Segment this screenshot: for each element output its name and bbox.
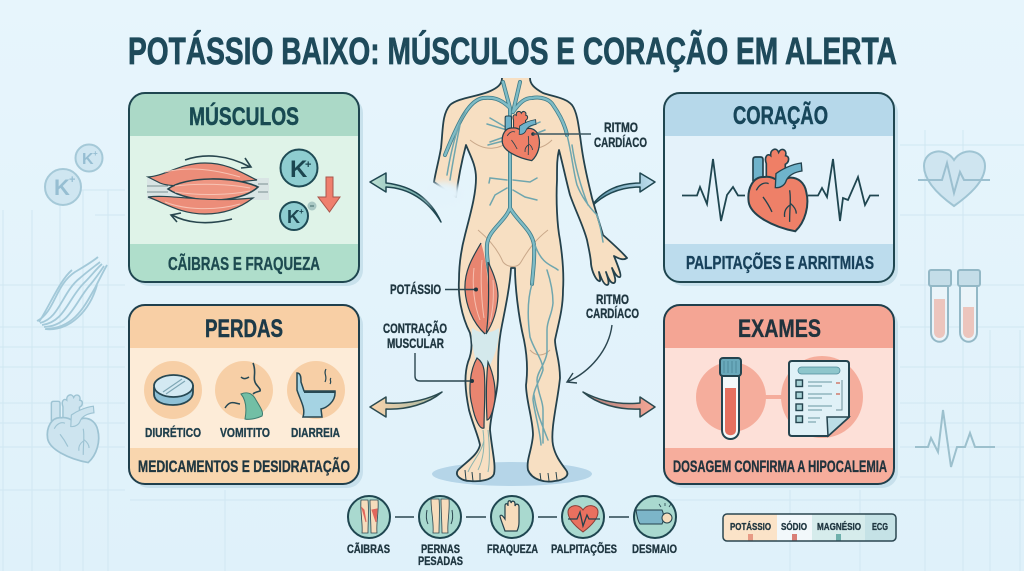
legend: SÓDIO bbox=[781, 520, 807, 533]
icon: lab report bbox=[789, 361, 849, 436]
knee bbox=[472, 328, 499, 367]
icon: toilet bbox=[287, 361, 345, 440]
body outline bbox=[434, 78, 627, 482]
panel: músculos bbox=[129, 93, 363, 286]
caption: palpitações e arritmias: PALPITAÇÕES E ARRITMIAS bbox=[686, 252, 874, 273]
label: ritmo cardíaco top: CARDÍACO bbox=[594, 135, 647, 150]
caption: medicamentos e desidratação: MEDICAMENTOS E DESIDRATAÇÃO bbox=[138, 456, 350, 476]
panel: exames bbox=[664, 305, 898, 488]
icon: potassium ions: + bbox=[93, 149, 98, 158]
icon: large K+ bbox=[280, 150, 318, 186]
icon: small K+: + bbox=[299, 207, 304, 216]
arrow: to perdas bbox=[370, 392, 442, 417]
label: ritmo cardíaco bottom: CARDÍACO bbox=[586, 306, 639, 321]
icon: large K+: K bbox=[290, 156, 308, 183]
heading: perdas: PERDAS bbox=[205, 315, 283, 343]
heading: músculos: MÚSCULOS bbox=[189, 101, 299, 131]
symptom: desmaio: DESMAIO bbox=[632, 542, 677, 556]
arrow: to exames bbox=[583, 392, 655, 417]
icon: test tubes bbox=[929, 270, 980, 342]
label: ritmo cardíaco bottom: RITMO bbox=[596, 292, 629, 307]
icon: muscle bbox=[37, 257, 107, 329]
chest heart bbox=[502, 111, 539, 161]
symptom: pernas pesadas bbox=[418, 496, 463, 568]
icon: heart bbox=[748, 149, 807, 231]
label: ritmo cardíaco bottom bbox=[567, 292, 639, 383]
label: ritmo cardíaco top bbox=[531, 120, 647, 150]
heading: coração: CORAÇÃO bbox=[733, 100, 828, 130]
icon: vomiting face bbox=[215, 361, 273, 440]
icon: muscle bundle bbox=[147, 156, 269, 223]
label: contração muscular: MUSCULAR bbox=[387, 336, 444, 351]
thin vessels bbox=[447, 112, 603, 445]
icon: potassium ions: K bbox=[82, 151, 94, 168]
icon: pill bbox=[144, 361, 202, 440]
ecg right bbox=[808, 159, 879, 221]
icon: pale heart bbox=[47, 395, 99, 463]
symptom: fraqueza bbox=[487, 496, 538, 556]
label: potássio: POTÁSSIO bbox=[390, 282, 441, 297]
symptom: desmaio bbox=[632, 496, 677, 556]
panel: perdas bbox=[129, 305, 363, 488]
arm fade bbox=[425, 182, 463, 206]
caption: cãibras e fraqueza: CÃIBRAS E FRAQUEZA bbox=[168, 253, 320, 274]
legend: ECG bbox=[872, 521, 888, 533]
symptom strip bbox=[347, 496, 677, 568]
label: diurético: DIURÉTICO bbox=[145, 425, 201, 440]
icon: blood tube bbox=[720, 358, 741, 439]
vessels highlight bbox=[445, 82, 567, 285]
main vessels bbox=[445, 82, 567, 285]
icon: small K+: K bbox=[287, 207, 300, 227]
legend bbox=[723, 514, 896, 541]
icon: heart with pulse bbox=[918, 151, 990, 206]
label: ritmo cardíaco top: RITMO bbox=[604, 120, 638, 135]
label: diarreia: DIARREIA bbox=[291, 425, 340, 440]
arrow: to músculos bbox=[370, 173, 441, 222]
arrow: to coração bbox=[591, 173, 655, 207]
label: contração muscular: CONTRAÇÃO bbox=[383, 321, 447, 336]
icon: potassium ions: + bbox=[69, 174, 75, 186]
caption: dosagem: DOSAGEM CONFIRMA A HIPOCALEMIA bbox=[673, 457, 887, 476]
legend: MAGNÉSIO bbox=[817, 520, 861, 533]
foot vessels bbox=[468, 430, 490, 472]
label: contração muscular bbox=[383, 321, 474, 383]
symptom: pernas pesadas: PESADAS bbox=[418, 554, 463, 568]
symptom: cãibras: CÃIBRAS bbox=[347, 541, 390, 556]
legend: POTÁSSIO bbox=[730, 520, 771, 533]
icon: background circles bbox=[696, 356, 863, 438]
icon: down arrow bbox=[318, 177, 340, 212]
calf muscles bbox=[470, 358, 495, 428]
thigh muscles bbox=[465, 243, 498, 334]
decorative icons left bbox=[37, 144, 107, 463]
symptom: cãibras bbox=[347, 496, 390, 556]
symptom: fraqueza: FRAQUEZA bbox=[487, 542, 538, 556]
decorative icons right bbox=[915, 151, 995, 467]
label: vomitito: VOMITITO bbox=[220, 425, 270, 440]
icon: ecg line bbox=[915, 410, 995, 467]
icon: large K+: + bbox=[305, 159, 311, 171]
symptom: pernas pesadas: PERNAS bbox=[421, 542, 460, 556]
symptom: palpitações bbox=[551, 496, 617, 556]
symptom: palpitações: PALPITAÇÕES bbox=[551, 541, 617, 556]
panel: coração bbox=[664, 93, 898, 286]
icon: small K+ bbox=[280, 202, 316, 230]
icon: potassium ions: K bbox=[54, 175, 70, 200]
ecg left bbox=[682, 159, 745, 221]
heading: exames: EXAMES bbox=[738, 315, 821, 343]
body figure bbox=[425, 78, 627, 486]
toes bbox=[465, 470, 557, 481]
ground shadow bbox=[432, 462, 592, 486]
icon: potassium ions bbox=[45, 144, 102, 205]
anatomy lines bbox=[470, 140, 552, 355]
